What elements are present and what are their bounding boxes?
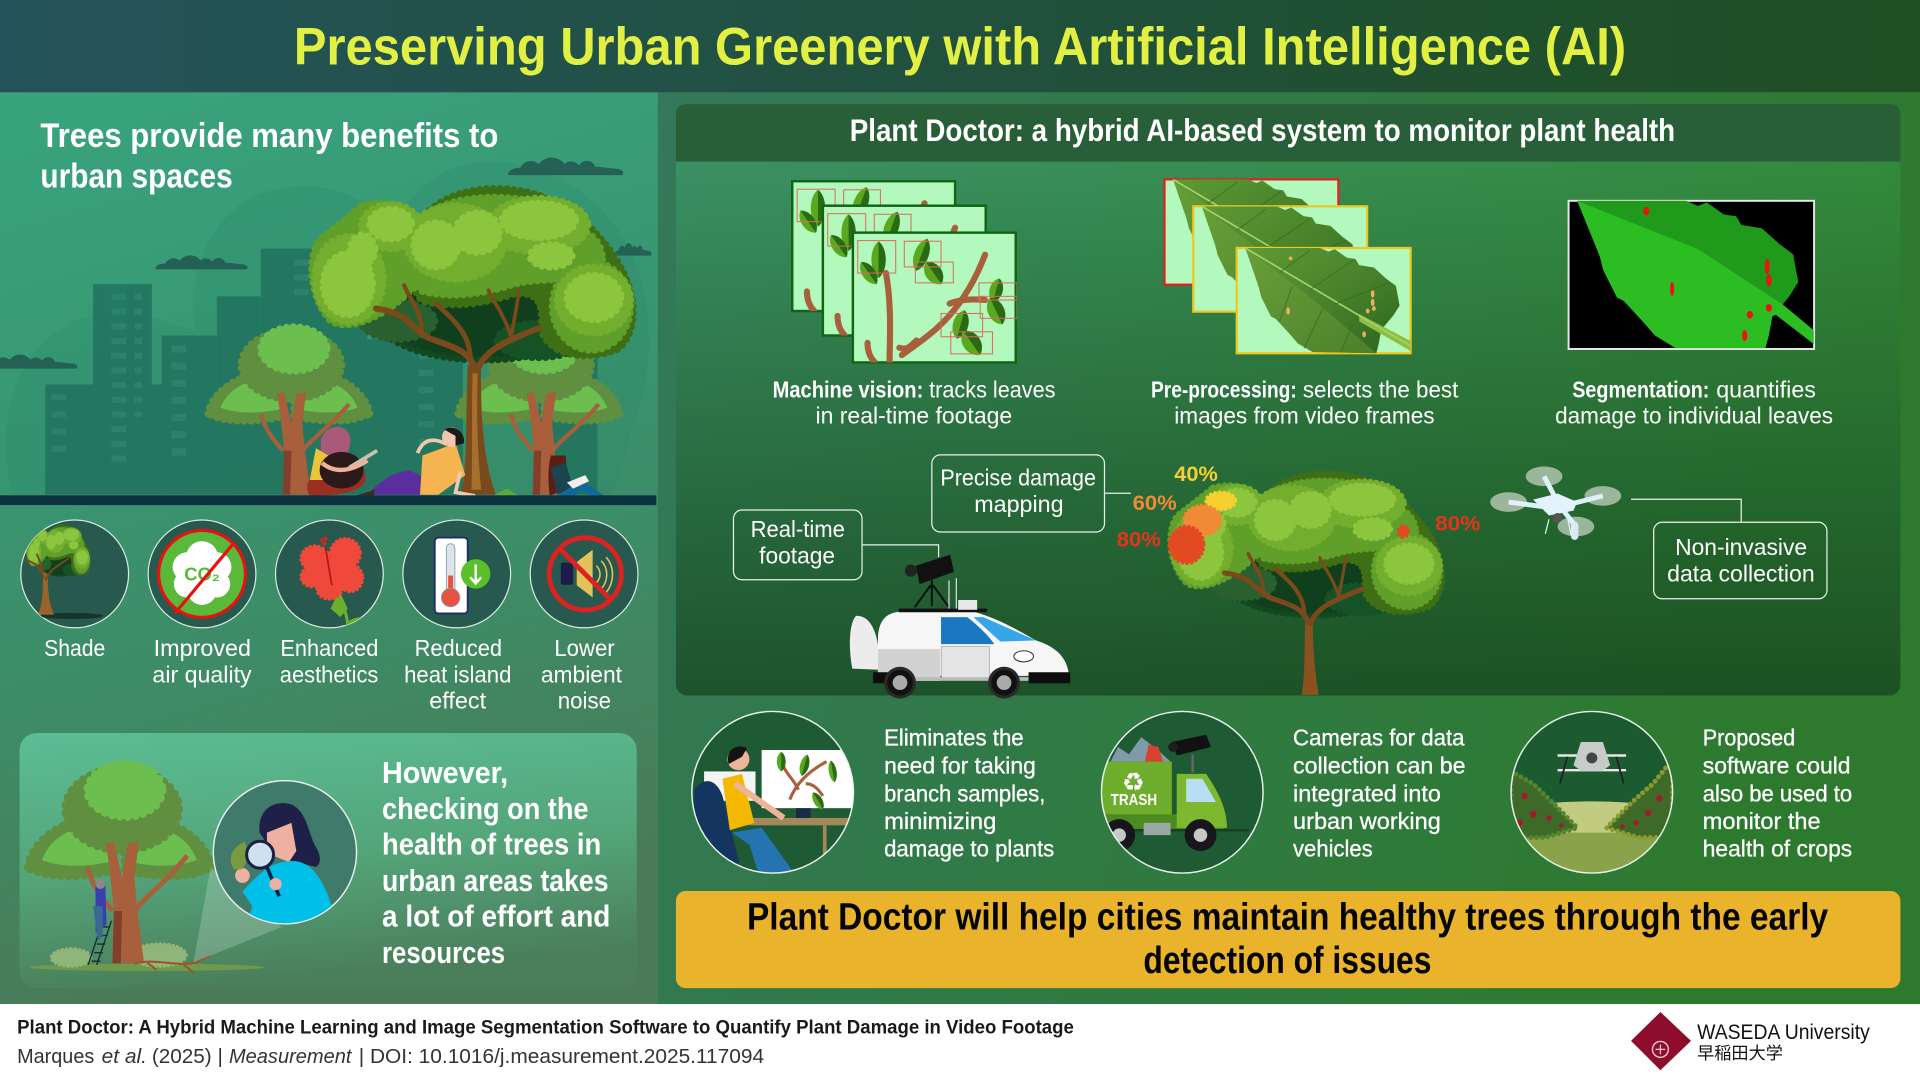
magnifier cone	[193, 867, 282, 962]
image: selected frames	[1164, 179, 1411, 353]
text: however: resources	[382, 936, 505, 970]
heading: benefits: urban spaces	[40, 157, 233, 195]
benefit labels: Enhanced	[280, 635, 378, 661]
benefit: vehicle cameras	[1078, 711, 1465, 873]
illustration: drone	[1490, 467, 1621, 540]
icon: woman inspecting leaf	[213, 781, 357, 931]
callout: precise damage mapping: Precise damage	[940, 465, 1096, 491]
illustration: large tree	[312, 189, 633, 495]
illustration: tree with worker on ladder	[28, 764, 264, 972]
text: proposed software: health of crops	[1703, 836, 1852, 862]
benefit icons	[21, 520, 638, 632]
caption: segmentation	[1555, 376, 1833, 429]
callout: real-time footage	[733, 510, 939, 580]
benefit labels: Shade	[44, 635, 105, 661]
conclusion banner	[676, 891, 1900, 988]
icon: drone over orchard	[1511, 711, 1673, 882]
text: cameras	[1293, 725, 1465, 862]
logo: Waseda University: 早稲田大学	[1697, 1043, 1783, 1063]
callout: precise damage mapping: mapping	[974, 491, 1064, 517]
icon: hibiscus flower	[276, 520, 383, 632]
text: eliminates: Eliminates the	[884, 725, 1024, 751]
heading: plant doctor: Plant Doctor: a hybrid AI-based system to monitor plant health	[850, 112, 1675, 148]
conclusion banner: detection of issues	[1143, 940, 1431, 982]
damage percentages: 40%	[1174, 463, 1218, 486]
damage percentages	[1117, 463, 1480, 552]
damage zones	[1169, 492, 1408, 563]
title: Preserving Urban Greenery with Artificial Intelligence (AI)	[294, 17, 1626, 76]
caption: machine vision: in real-time footage	[816, 403, 1012, 429]
citation details: Marques	[17, 1046, 94, 1068]
text: proposed software: also be used to	[1703, 780, 1852, 806]
heading: benefits	[40, 117, 498, 195]
text: however: However,	[382, 756, 508, 790]
callout card: checking tree health	[20, 733, 637, 988]
icon: person at computer	[692, 711, 853, 876]
panel: system overview	[676, 104, 1900, 699]
citation title: Plant Doctor: A Hybrid Machine Learning and Image Segmentation Software to Quantify Plant Damage in Video Footage	[17, 1016, 1074, 1038]
text: eliminates: minimizing	[884, 808, 996, 834]
damage percentages: 80%	[1435, 513, 1480, 536]
illustration: people under trees	[307, 427, 606, 502]
text: however: a lot of effort and	[382, 900, 610, 934]
icon: shade tree	[21, 520, 129, 628]
text: eliminates: branch samples,	[884, 780, 1045, 806]
citation details: et al.	[102, 1046, 147, 1068]
callout: non-invasive data collection: data collection	[1667, 561, 1815, 587]
benefit labels: heat island	[404, 662, 511, 688]
step: machine vision	[773, 181, 1056, 429]
benefit labels: aesthetics	[280, 662, 378, 688]
heading: benefits: Trees provide many benefits to	[40, 117, 498, 155]
ground line	[0, 495, 656, 505]
text: cameras: Cameras for data	[1293, 725, 1465, 751]
image: segmented leaf	[1569, 201, 1814, 349]
logo: Waseda University: WASEDA University	[1697, 1021, 1870, 1044]
benefit labels: Reduced	[415, 635, 502, 661]
caption: segmentation: damage to individual leaves	[1555, 403, 1833, 429]
step: segmentation	[1555, 201, 1833, 429]
caption: machine vision: tracks leaves	[929, 376, 1056, 402]
text: cameras: urban working	[1293, 808, 1441, 834]
citation details: Measurement	[229, 1046, 353, 1068]
city background	[0, 158, 652, 495]
text: proposed software: Proposed	[1703, 725, 1795, 751]
image: tracked leaf frames	[792, 181, 1017, 362]
panel: benefits of trees	[0, 92, 658, 1004]
text: cameras: integrated into	[1293, 780, 1441, 806]
text: eliminates: need for taking	[884, 752, 1036, 778]
caption: segmentation: Segmentation:	[1572, 376, 1709, 402]
callout: non-invasive data collection: Non-invasive	[1675, 534, 1807, 560]
truck label: TRASH	[1111, 792, 1157, 809]
benefit labels	[44, 635, 623, 714]
recycling symbol: ♻	[1122, 768, 1145, 798]
text: however: urban areas takes	[382, 864, 609, 898]
caption: machine vision	[773, 376, 1056, 429]
icon: CO2: CO₂	[184, 563, 220, 584]
illustration: small tree left	[208, 327, 370, 495]
citation details: | DOI: 10.1016/j.measurement.2025.117094	[359, 1046, 764, 1068]
title bar	[0, 0, 1920, 92]
caption: pre-processing: Pre-processing:	[1151, 376, 1297, 402]
icon: trash truck with camera	[1100, 710, 1264, 874]
callout: precise damage mapping	[932, 455, 1131, 532]
callout: real-time footage: footage	[759, 542, 835, 568]
citation details: (2025) |	[152, 1046, 223, 1068]
text: eliminates	[884, 725, 1054, 862]
benefit: eliminates samples	[692, 711, 1054, 876]
text: proposed software: monitor the	[1703, 808, 1821, 834]
text: eliminates: damage to plants	[884, 836, 1054, 862]
caption: pre-processing: selects the best	[1303, 376, 1459, 402]
text: cameras: vehicles	[1293, 836, 1373, 862]
text: proposed software	[1703, 725, 1852, 862]
benefit labels: Lower	[554, 635, 615, 661]
text: however: checking on the	[382, 792, 588, 826]
damage percentages: 80%	[1117, 529, 1161, 552]
text: cameras: collection can be	[1293, 752, 1465, 778]
icon: thermometer	[403, 520, 511, 628]
illustration: small tree right	[458, 327, 620, 495]
text: proposed software: software could	[1703, 752, 1851, 778]
benefit: crop monitoring	[1511, 711, 1852, 882]
caption: pre-processing	[1151, 376, 1459, 429]
step: pre-processing	[1151, 179, 1459, 429]
footer	[0, 1004, 1920, 1080]
text: however: health of trees in	[382, 828, 601, 862]
logo: Waseda University	[1631, 1012, 1870, 1070]
caption: segmentation: quantifies	[1716, 376, 1816, 402]
benefit labels: Improved	[154, 635, 251, 661]
callout: non-invasive data collection	[1631, 499, 1827, 599]
benefit labels: ambient	[541, 662, 623, 688]
icon: CO2	[148, 520, 256, 628]
icon: no noise	[530, 520, 638, 628]
benefit labels: noise	[558, 688, 611, 714]
citation details	[17, 1046, 764, 1068]
caption: pre-processing: images from video frames	[1174, 403, 1435, 429]
callout: real-time footage: Real-time	[751, 516, 845, 542]
benefit labels: air quality	[152, 662, 252, 688]
text: however	[382, 756, 610, 970]
illustration: camera van	[850, 555, 1070, 699]
benefit labels: effect	[429, 688, 487, 714]
illustration: mapped tree	[1117, 463, 1480, 695]
panel: plant doctor	[658, 92, 1920, 1004]
header band	[676, 104, 1900, 162]
caption: machine vision: Machine vision:	[773, 376, 923, 402]
damage percentages: 60%	[1133, 492, 1177, 515]
